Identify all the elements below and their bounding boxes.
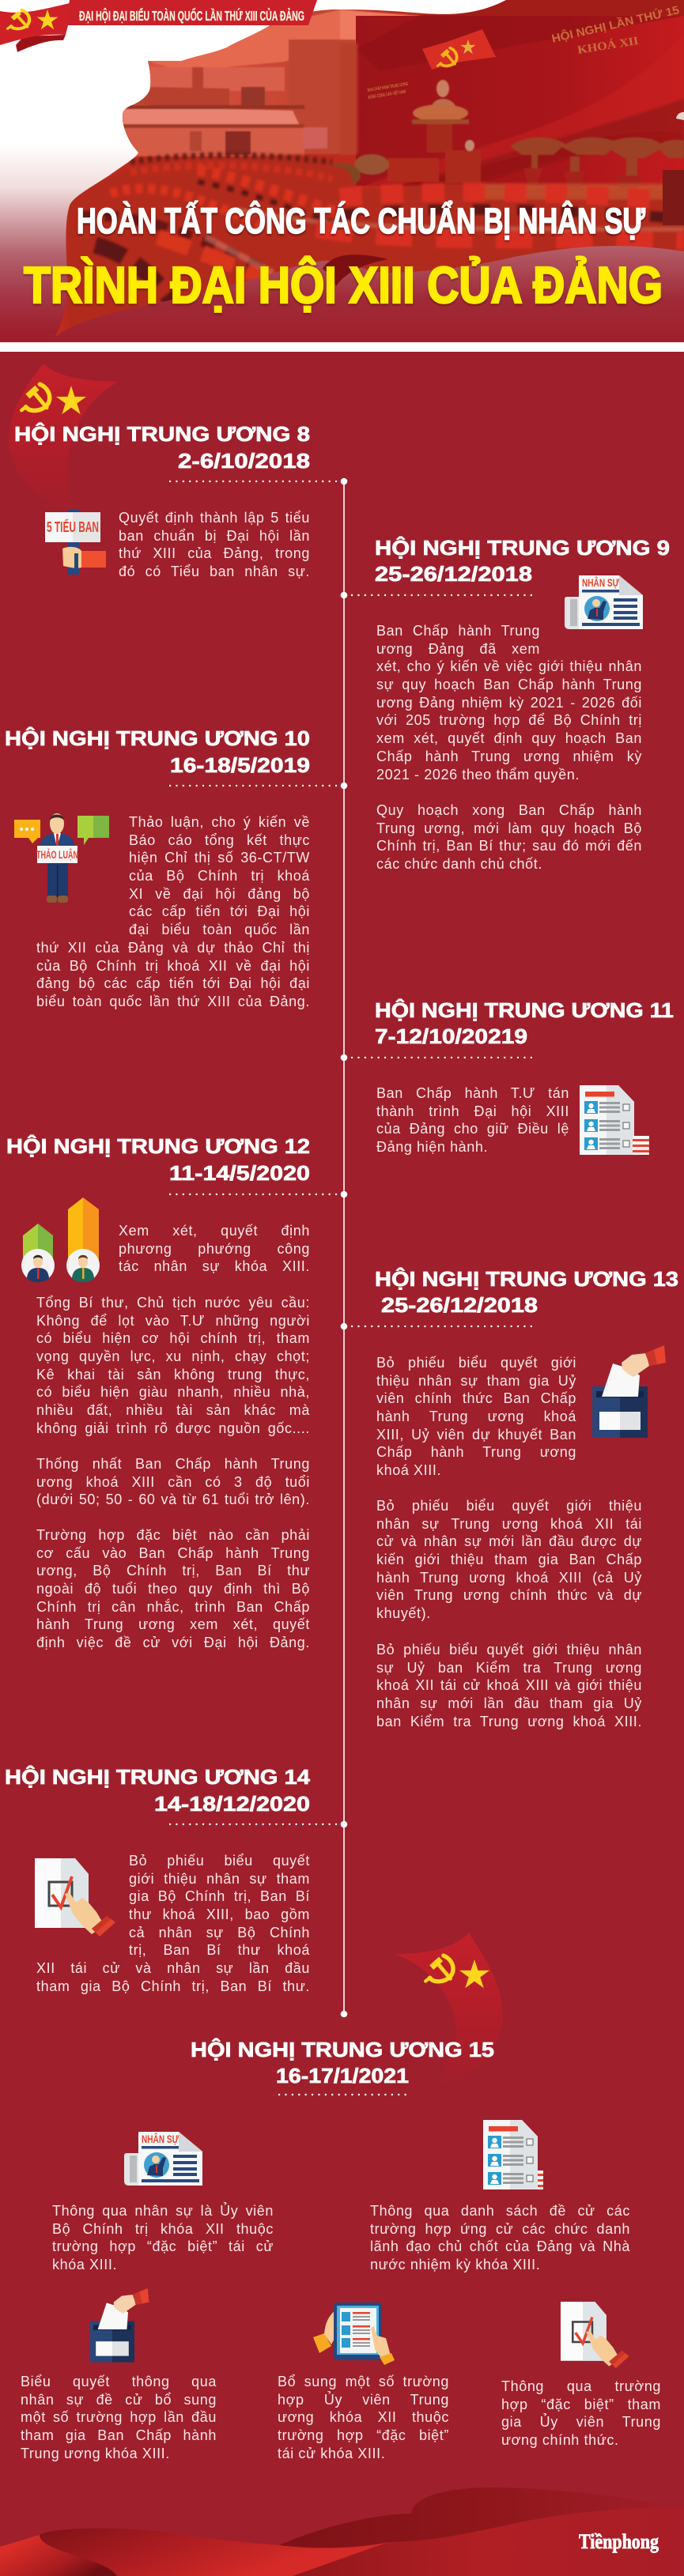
text: conference 12 requirements: Kê khai tài sản không trung thực,	[36, 1367, 310, 1382]
text: conference 9 intro: 2021 - 2026 theo thẩm quyền.	[376, 767, 580, 783]
text: conference 14: gia Bộ Chính trị, Ban Bí	[129, 1888, 310, 1904]
text: conference 10: đảng bộ các cấp tiến tới Đại hội đại	[36, 975, 310, 991]
text: conference 12 intro: Xem xét, quyết định	[119, 1223, 310, 1239]
text: conference 9 detail: Chính trị, Ban Bí thư; sau đó mới đến	[376, 838, 642, 854]
text: conference 10: Báo cáo tổng kết thực	[129, 832, 310, 848]
heading: conference 14	[5, 1765, 311, 1816]
heading: conference 8	[14, 422, 310, 473]
icon: speaker with discussion bubbles	[14, 813, 109, 903]
text: conference 12 special cases: định việc đề cử với Đại hội Đảng.	[36, 1635, 310, 1650]
text: conference 9 detail: Trung ương, mới làm quy hoạch Bộ	[376, 820, 642, 836]
heading: conference 13: 25-26/12/2018	[381, 1295, 538, 1317]
text: conference 13 third vote: sự Uỷ ban Kiểm tra Trung ương	[376, 1660, 642, 1676]
publication band: ĐẠI HỘI ĐẠI BIỂU TOÀN QUỐC LẦN THỨ XIII CỦA ĐẢNG	[79, 7, 304, 24]
timeline line	[341, 478, 347, 2017]
text: conference 15 nominations: lãnh đạo chủ chốt của Đảng và Nhà	[370, 2238, 630, 2254]
text: conference 8: thứ XIII của Đảng, trong	[119, 545, 310, 561]
text: conference 10: XI về đại hội đảng bộ	[129, 886, 310, 902]
text: conference 13 second vote: Bỏ phiếu biểu quyết giới thiệu	[376, 1498, 642, 1514]
wall slogan: BAN CHẤP HÀNH TRUNG ƯƠNG	[367, 81, 409, 93]
text: conference 14: cả nhân sự Bộ Chính	[129, 1925, 310, 1940]
text: conference 12 special cases: Chính trị cân nhắc, trình Ban Chấp	[36, 1599, 310, 1615]
text: conference 10: Thảo luận, cho ý kiến về	[129, 814, 310, 830]
text: conference 12 age groups: (dưới 50; 50 - 60 và từ 61 tuổi trở lên).	[36, 1492, 310, 1507]
icon: ballot box 2	[90, 2288, 149, 2363]
heading: conference 10: 16-18/5/2019	[170, 755, 310, 777]
heading: conference 11: 7-12/10/20219	[375, 1026, 527, 1048]
text: conference 15 Politburo	[52, 2202, 274, 2272]
decorative flag conference 15	[395, 1933, 503, 2092]
decorative flag top of timeline	[9, 364, 118, 522]
text: conference 15 official members: Thông qua trường	[501, 2378, 661, 2394]
ribbon fold	[323, 255, 388, 286]
heading: conference 12: HỘI NGHỊ TRUNG ƯƠNG 12	[6, 1134, 310, 1158]
text: conference 15 special re-election: trường hợp “đặc biệt”	[278, 2427, 449, 2443]
heading: conference 8: 2-6/10/2018	[178, 451, 310, 473]
heading: conference 15: 16-17/1/2021	[276, 2065, 409, 2088]
text: conference 15 additions	[21, 2374, 217, 2461]
text: conference 15 special re-election: ương khóa XII thuộc	[278, 2409, 449, 2425]
floor and seat rows	[67, 154, 684, 342]
heading: conference 13	[375, 1267, 678, 1317]
text: conference 8: đó có Tiểu ban nhân sự.	[119, 564, 310, 579]
text: conference 11	[376, 1085, 569, 1155]
text: conference 15 official members: hợp “đặc biệt” tham	[501, 2397, 661, 2412]
wall slogan	[367, 2, 681, 100]
text: conference 13 second vote	[376, 1498, 642, 1621]
heading: conference 11	[375, 998, 674, 1048]
text: conference 15 special re-election: tái cử khóa XIII.	[278, 2446, 385, 2461]
text: conference 13 first vote: hành Trung ương khoá	[376, 1409, 576, 1424]
text: conference 12 requirements: có biểu hiện giàu nhanh, nhiều nhà,	[36, 1384, 310, 1400]
text: conference 12 requirements: Không để lọt vào T.Ư những người	[36, 1313, 310, 1329]
text: conference 13 second vote: hành Trung ương khoá XIII (cả Uỷ	[376, 1570, 642, 1586]
icon: personnel newspaper: NHÂN SỰ	[582, 575, 619, 589]
text: conference 9 detail	[376, 802, 642, 872]
text: conference 13 first vote: Chấp hành Trung ương	[376, 1444, 576, 1460]
text: conference 13 second vote: kiến giới thiệu tham gia Ban Chấp	[376, 1552, 642, 1567]
icon: 5 tiểu ban sign	[45, 510, 106, 575]
text: conference 15 special re-election	[278, 2374, 449, 2461]
text: conference 9 intro: ương Đảng đã xem	[376, 641, 540, 657]
text: conference 14: trị, Ban Bí thư khoá	[129, 1942, 310, 1958]
icon: candidate list document 2	[483, 2120, 543, 2189]
text: conference 15 nominations	[370, 2203, 630, 2272]
heading: conference 15: HỘI NGHỊ TRUNG ƯƠNG 15	[191, 2038, 494, 2061]
text: conference 11: của Đảng cho giữ Điều lệ	[376, 1121, 569, 1137]
heading: conference 14: HỘI NGHỊ TRUNG ƯƠNG 14	[5, 1765, 311, 1789]
text: conference 10: đại biểu toàn quốc lần	[129, 922, 310, 937]
text: conference 10: hiện Chỉ thị số 36-CT/TW	[129, 850, 310, 866]
text: conference 9 intro	[376, 623, 642, 783]
text: conference 15 special re-election: Bổ sung một số trường	[278, 2374, 449, 2389]
heading: conference 8: HỘI NGHỊ TRUNG ƯƠNG 8	[14, 422, 310, 446]
icon: tablet with candidate list	[313, 2303, 395, 2365]
text: conference 8: Quyết định thành lập 5 tiểu	[119, 510, 310, 526]
heading: conference 9: HỘI NGHỊ TRUNG ƯƠNG 9	[375, 536, 670, 560]
text: conference 12 special cases	[36, 1527, 310, 1650]
text: conference 13 second vote: viên Trung ương chính thức và dự	[376, 1587, 642, 1603]
text: conference 13 first vote: viên chính thức Ban Chấp	[376, 1390, 576, 1406]
text: conference 12 age groups: ương khoá XIII cần có 3 độ tuổi	[36, 1474, 310, 1490]
text: conference 8: ban chuẩn bị Đại hội lần	[119, 528, 310, 544]
heading: conference 13: HỘI NGHỊ TRUNG ƯƠNG 13	[375, 1267, 678, 1291]
icon: personnel newspaper	[565, 575, 643, 629]
text: conference 9 intro: ương Đảng nhiệm kỳ 2021 - 2026 đối	[376, 695, 642, 711]
text: conference 9 intro: sự quy hoạch Ban Chấp hành Trung	[376, 677, 642, 692]
icon: 5 tiểu ban sign: 5 TIỂU BAN	[47, 519, 99, 535]
icon: checklist	[35, 1858, 115, 1937]
text: conference 15 additions: nhân sự đề cử bổ sung	[21, 2392, 217, 2408]
text: conference 15 official members	[501, 2378, 661, 2448]
heading: conference 9	[375, 536, 670, 586]
icon: candidate list document	[580, 1085, 649, 1155]
text: conference 14	[36, 1853, 310, 1994]
text: conference 12 special cases: cơ cấu vào Ban Chấp hành Trung	[36, 1545, 310, 1561]
text: conference 10: của Bộ Chính trị khoá XII về đại hội	[36, 958, 310, 974]
hero banner	[0, 0, 684, 352]
text: conference 12 requirements: không giải trình rõ được nguồn gốc....	[36, 1420, 310, 1436]
text: conference 11: Đảng hiện hành.	[376, 1139, 488, 1155]
text: conference 15 official members: ương chính thức.	[501, 2432, 619, 2448]
icon: ballot box	[592, 1345, 666, 1438]
text: conference 12 intro: phương phướng công	[119, 1241, 310, 1257]
text: conference 8	[119, 510, 310, 579]
white strip below hero	[0, 342, 684, 352]
text: conference 13 first vote: thiệu nhân sự tham gia Uỷ	[376, 1373, 576, 1389]
text: conference 15 special re-election: hợp Ủy viên Trung	[278, 2392, 449, 2408]
text: conference 15 official members: gia Ủy viên Trung	[501, 2414, 661, 2430]
text: conference 12 special cases: ương, Bộ Chính trị, Ban Bí thư	[36, 1563, 310, 1578]
text: conference 13 second vote: khuyết).	[376, 1605, 431, 1621]
wall slogan: KHOÁ XII	[576, 34, 640, 57]
icon: personnel arrows	[21, 1197, 100, 1282]
heading: conference 10: HỘI NGHỊ TRUNG ƯƠNG 10	[5, 726, 310, 750]
text: conference 15 Politburo: trường hợp “đặc biệt” tái cử	[52, 2238, 274, 2254]
text: conference 10: thứ XII của Đảng và dự thảo Chỉ thị	[36, 940, 310, 956]
cameraman	[663, 112, 684, 225]
text: conference 12 requirements: nhiều đất, nhiều tài sản khác mà	[36, 1402, 310, 1418]
text: conference 12 requirements: vọng quyền lực, xu nịnh, chạy chọt;	[36, 1348, 310, 1364]
text: conference 10: của Bộ Chính trị khoá	[129, 868, 310, 884]
hero wave	[55, 246, 684, 342]
hero photo: congress hall	[0, 0, 684, 342]
text: conference 14: Bỏ phiếu biểu quyết	[129, 1853, 310, 1869]
ribbon left wedge	[0, 2535, 117, 2576]
ribbon lower right	[279, 2487, 684, 2576]
top-left flag	[0, 0, 317, 52]
text: conference 12 requirements: có biểu hiện cơ hội chính trị, tham	[36, 1330, 310, 1346]
text: conference 15 nominations: Thông qua danh sách đề cử các	[370, 2203, 630, 2219]
text: conference 12 age groups: Thống nhất Ban Chấp hành Trung	[36, 1456, 310, 1472]
text: conference 12 intro: tác nhân sự khóa XIII.	[119, 1258, 310, 1274]
text: conference 9 intro: xét, cho ý kiến về việc giới thiệu nhân	[376, 658, 642, 674]
text: conference 9 intro: xem xét, quyết định quy hoạch Ban	[376, 730, 642, 746]
text: conference 11: Ban Chấp hành T.Ư tán	[376, 1085, 569, 1101]
text: conference 9 intro: Chấp hành Trung ương nhiệm kỳ	[376, 749, 642, 764]
text: conference 15 additions: tham gia Ban Chấp hành	[21, 2427, 217, 2443]
text: conference 13 second vote: cử và nhân sự mới lần đầu được dự	[376, 1533, 642, 1549]
text: conference 13 third vote: ban Kiểm tra Trung ương khoá XIII.	[376, 1714, 642, 1729]
text: conference 9 detail: Quy hoạch xong Ban Chấp hành	[376, 802, 642, 818]
text: conference 13 first vote: khoá XIII.	[376, 1462, 441, 1478]
text: conference 13 second vote: nhân sự Trung ương khoá XII tái	[376, 1516, 642, 1532]
text: conference 14: tham gia Bộ Chính trị, Ban Bí thư.	[36, 1978, 310, 1994]
heading: conference 9: 25-26/12/2018	[375, 564, 532, 586]
text: conference 15 nominations: trường hợp ứng cử các chức danh	[370, 2221, 630, 2237]
text: conference 14: XII tái cử và nhân sự lần đầu	[36, 1960, 310, 1976]
heading: conference 15	[191, 2038, 494, 2088]
wall slogan: HỘI NGHỊ LẦN THỨ 15	[550, 2, 681, 46]
bottom ribbon	[0, 2487, 684, 2576]
text: conference 15 additions: Trung ương khóa XIII.	[21, 2446, 170, 2461]
wall flag	[422, 29, 496, 70]
text: conference 12 special cases: hành Trung ương xem xét, quyết	[36, 1616, 310, 1632]
wall slogan: ĐẢNG CỘNG SẢN VIỆT NAM	[368, 89, 406, 100]
text: conference 14: giới thiệu nhân sự tham	[129, 1871, 310, 1887]
text: conference 9 intro: Ban Chấp hành Trung	[376, 623, 540, 639]
text: conference 13 third vote	[376, 1642, 642, 1729]
text: conference 13 first vote: XIII, Uỷ viên dự khuyết Ban	[376, 1427, 576, 1443]
text: conference 9 intro: với 205 trường hợp để Bộ Chính trị	[376, 712, 642, 728]
palms and pots	[510, 137, 684, 187]
text: conference 14: thư khoá XIII, bao gồm	[129, 1907, 310, 1922]
heading: conference 14: 14-18/12/2020	[154, 1793, 310, 1816]
heading: conference 10	[5, 726, 310, 777]
text: conference 12 requirements	[36, 1295, 310, 1436]
publication band	[66, 0, 317, 25]
text: conference 12 intro	[119, 1223, 310, 1274]
heading: conference 12	[6, 1134, 310, 1185]
text: conference 9 detail: các chức danh chủ chốt.	[376, 856, 542, 872]
text: conference 12 special cases: Trường hợp đặc biệt nào cần phải	[36, 1527, 310, 1543]
text: conference 10: biểu toàn quốc lần thứ XIII của Đảng.	[36, 994, 310, 1009]
icon: checklist 2	[561, 2302, 629, 2368]
heading: conference 12: 11-14/5/2020	[169, 1163, 310, 1185]
ribbon dark upper fold	[279, 2487, 684, 2548]
heading: conference 11: HỘI NGHỊ TRUNG ƯƠNG 11	[375, 998, 674, 1022]
text: conference 12 special cases: ngoài độ tuổi theo quy định thì Bộ	[36, 1581, 310, 1597]
text: conference 15 additions: Biểu quyết thông qua	[21, 2374, 217, 2389]
logo: Tiền phong: Tiềnphong	[579, 2530, 659, 2553]
text: conference 10: các cấp tiến tới Đại hội	[129, 903, 310, 919]
text: conference 12 requirements: Tổng Bí thư, Chủ tịch nước yêu cầu:	[36, 1295, 310, 1311]
icon: personnel newspaper 2	[124, 2132, 202, 2186]
text: conference 13 third vote: khoá XII tái cử khoá XIII và giới thiệu	[376, 1677, 642, 1693]
ribbon middle	[40, 2529, 388, 2576]
text: conference 15 Politburo: khóa XIII.	[52, 2257, 117, 2272]
podium	[331, 139, 481, 185]
text: conference 15 nominations: nước nhiệm kỳ khóa XIII.	[370, 2257, 540, 2272]
bust and flowers	[412, 80, 469, 153]
text: conference 13 first vote: Bỏ phiếu biểu quyết giới	[376, 1355, 576, 1371]
icon: speaker with discussion bubbles: THẢO LUẬN	[36, 847, 78, 861]
text: conference 10	[36, 814, 310, 1009]
text: conference 15 Politburo: Bộ Chính trị khóa XII thuộc	[52, 2221, 274, 2237]
text: conference 12 age groups	[36, 1456, 310, 1507]
text: conference 13 third vote: Bỏ phiếu biểu quyết giới thiệu nhân	[376, 1642, 642, 1658]
text: conference 15 Politburo: Thông qua nhân sự là Ủy viên	[52, 2203, 274, 2219]
text: conference 11: thành trình Đại hội XIII	[376, 1103, 569, 1119]
text: conference 13 third vote: nhân sự mới lần đầu tham gia Uỷ	[376, 1695, 642, 1711]
icon: personnel newspaper 2: NHÂN SỰ	[142, 2132, 179, 2145]
text: conference 13 first vote	[376, 1355, 576, 1478]
text: conference 15 additions: một số trường hợp lần đầu	[21, 2409, 217, 2425]
